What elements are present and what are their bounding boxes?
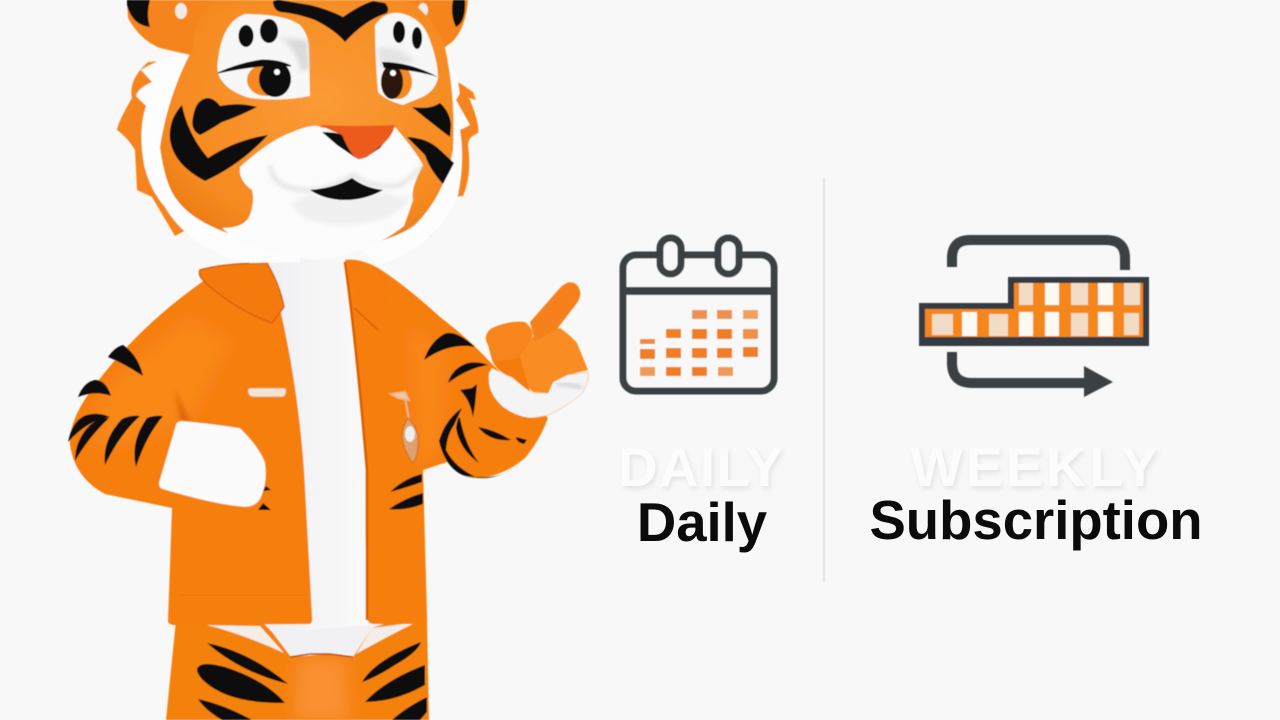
fur orange fringe — [117, 60, 200, 236]
right collar — [347, 260, 392, 330]
caption: Daily: Daily — [637, 492, 768, 553]
caption: Subscription: Subscription — [869, 490, 1203, 551]
mouth — [310, 178, 383, 200]
white heading: DAILY: DAILY — [618, 436, 784, 498]
calendar icon — [623, 238, 774, 391]
label: daily — [618, 436, 786, 553]
white heading: WEEKLY: WEEKLY — [911, 436, 1161, 498]
zipper charm — [391, 392, 418, 463]
tiger mascot — [68, 0, 588, 720]
muzzle shadow — [270, 165, 423, 190]
muzzle white — [222, 126, 423, 260]
calendar rings — [660, 238, 739, 274]
forehead spots — [238, 19, 422, 49]
chest pocket — [248, 388, 286, 397]
shirt front — [262, 258, 372, 630]
leg stripes — [197, 642, 427, 720]
head — [160, 0, 454, 250]
jacket right panel and right arm — [345, 260, 548, 624]
trousers — [166, 620, 429, 720]
eye patch right — [375, 13, 438, 105]
right cuff — [489, 368, 588, 418]
right eye — [381, 62, 438, 99]
shirt hem — [207, 622, 417, 654]
left collar — [199, 263, 284, 323]
left eye — [218, 60, 291, 97]
top loop arrow — [952, 240, 1125, 270]
stepped bar — [922, 280, 1146, 345]
left arm stripes — [68, 345, 163, 467]
divider — [823, 178, 825, 582]
white heading: DAILY: DAILY — [620, 439, 786, 501]
white heading: WEEKLY: WEEKLY — [913, 439, 1163, 501]
ears — [127, 0, 468, 55]
fur white — [136, 52, 300, 263]
jacket shading — [100, 320, 445, 595]
eye patch left — [217, 14, 310, 100]
nose — [320, 125, 395, 159]
cheek stripes — [170, 98, 454, 184]
jacket left panel and left arm — [70, 262, 312, 625]
right arm stripes — [424, 333, 527, 478]
subscription icon — [922, 240, 1146, 397]
label: subscription — [869, 436, 1203, 551]
left fist — [159, 421, 266, 507]
jacket right stripes — [389, 474, 423, 509]
bottom loop arrow — [952, 352, 1088, 383]
small stripes beside fist — [258, 486, 271, 510]
calendar bars — [640, 310, 758, 376]
forehead brow stripe — [273, 0, 388, 42]
pointing hand — [486, 282, 588, 393]
